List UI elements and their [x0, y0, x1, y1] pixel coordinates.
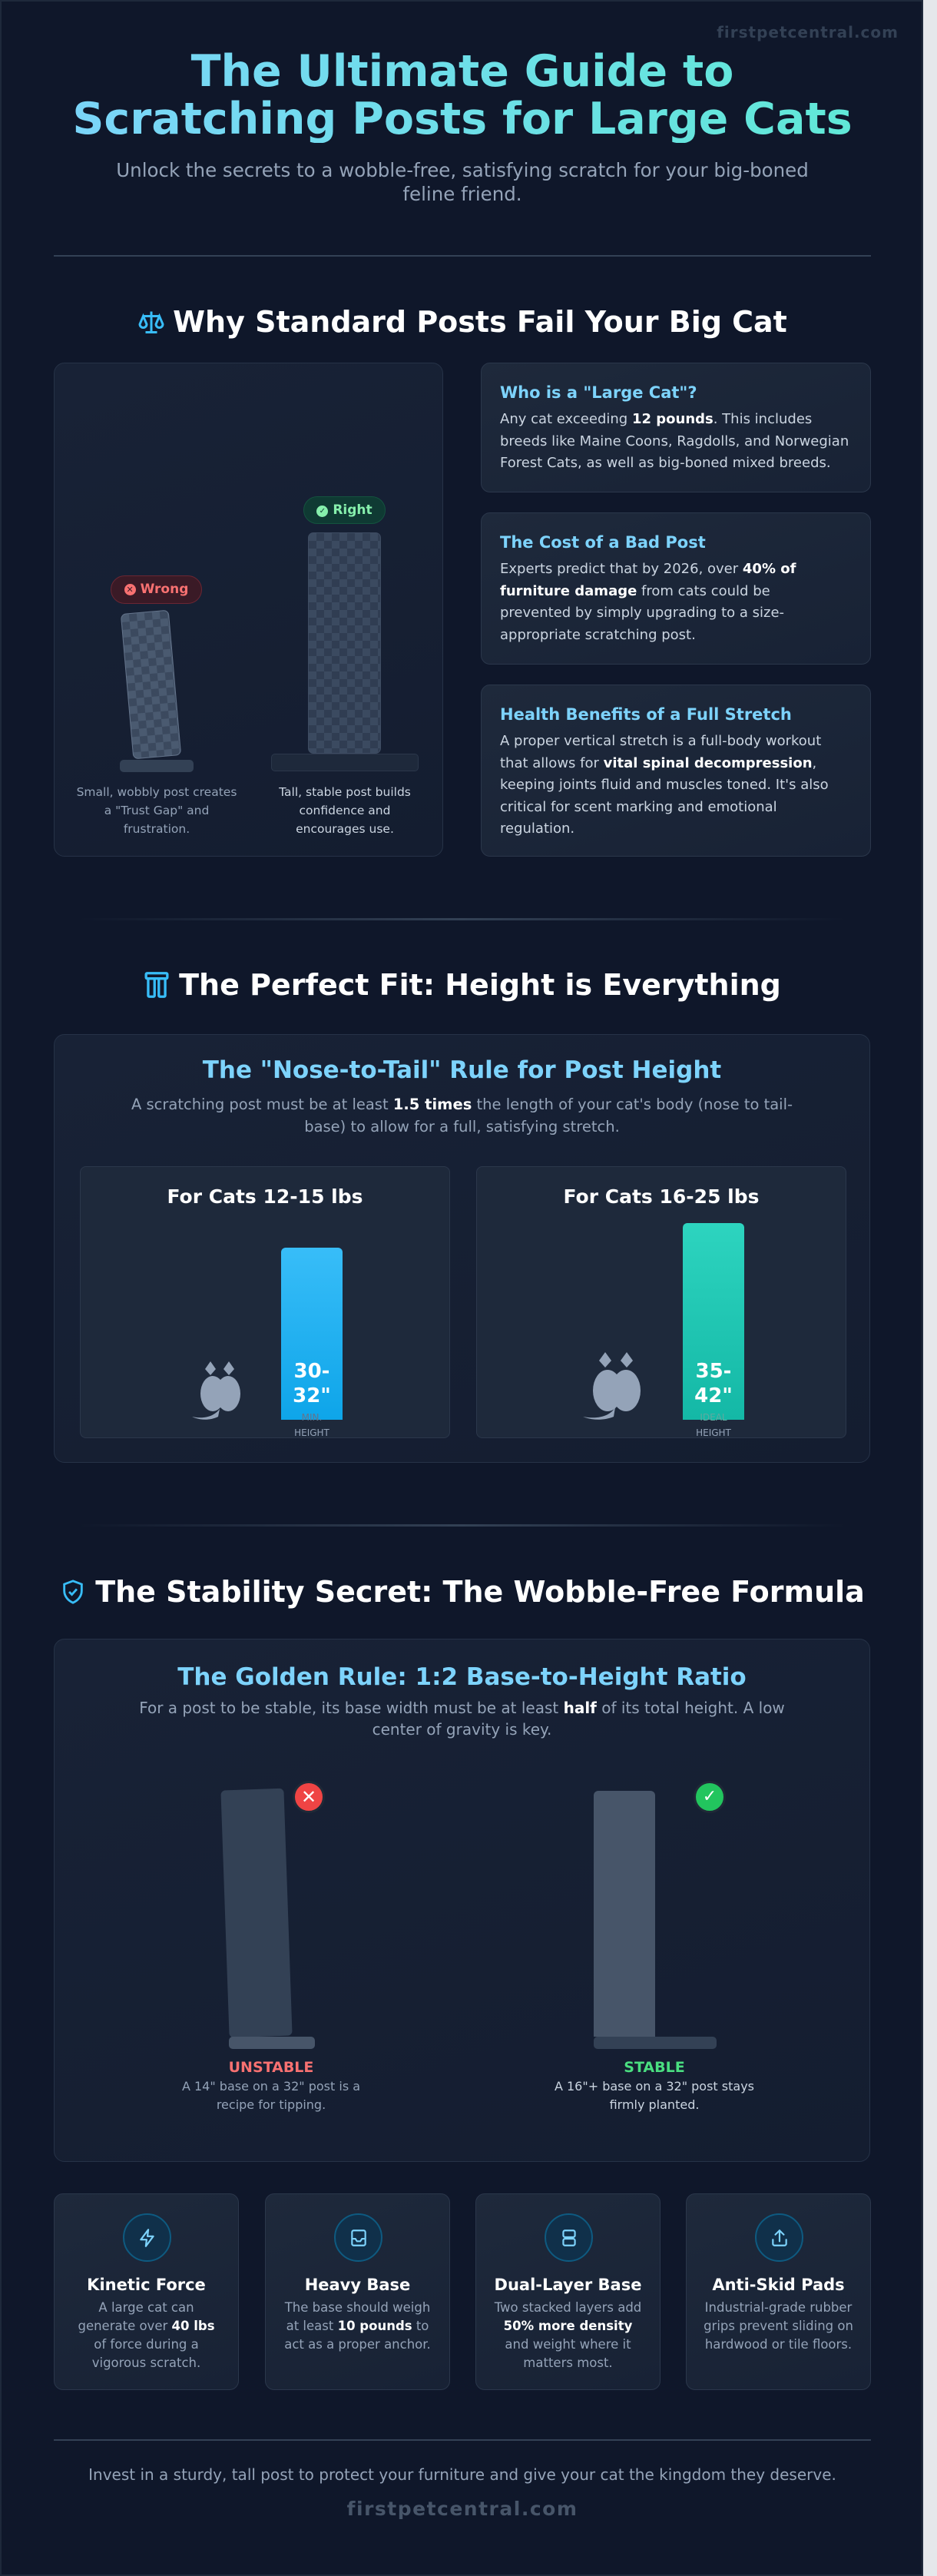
panel: golden rule: The Golden Rule: 1:2 Base-to-Height Ratio — [177, 1663, 747, 1691]
feature: dual-layer base: Dual-Layer Base — [495, 2276, 641, 2294]
feature: heavy base: Heavy Base — [305, 2276, 410, 2294]
card: health: A proper vertical stretch is a full-body workout — [500, 733, 821, 749]
feature: anti-skid pads — [686, 2193, 871, 2390]
stable label — [555, 2059, 754, 2112]
feature: anti-skid pads: Anti-Skid Pads — [712, 2276, 845, 2294]
subcard: 16-25 lbs: For Cats 16-25 lbs — [563, 1185, 760, 1208]
stable label: A 16"+ base on a 32" post stays — [555, 2079, 754, 2094]
card: health: critical for scent marking and emotional — [500, 799, 777, 814]
badge: right — [303, 496, 386, 524]
badge: wrong: ✕ — [126, 585, 134, 595]
subcard: 12-15 lbs — [80, 1166, 450, 1438]
feature: kinetic force — [54, 2193, 239, 2390]
heading: stability: The Stability Secret: The Wobble-Free Formula — [95, 1575, 865, 1609]
subcard: 12-15 lbs: HEIGHT — [294, 1427, 329, 1438]
unstable label: UNSTABLE — [229, 2059, 313, 2076]
stable label: firmly planted. — [610, 2097, 699, 2112]
panel: height rule: A scratching post must be at least 1.5 times the length of your cat's body (nose to tail-base) to allow for a full, satisfying stretch. — [131, 1096, 793, 1135]
footer site: firstpetcentral.com — [347, 2498, 578, 2520]
card: large cat: Forest Cats, as well as big-boned mixed breeds. — [500, 455, 831, 471]
unstable label — [182, 2059, 360, 2112]
card: health: Health Benefits of a Full Stretch — [500, 705, 792, 724]
panel: wrong vs right posts — [54, 363, 443, 857]
panel: height rule: The "Nose-to-Tail" Rule for Post Height — [203, 1056, 721, 1084]
feature: heavy base — [265, 2193, 450, 2390]
badge: right: ✓ — [320, 507, 326, 516]
feature: dual-layer base: Two stacked layers add 50% more density and weight where it matters most. — [495, 2300, 641, 2370]
badge: wrong: Wrong — [141, 582, 188, 597]
unstable label: A 14" base on a 32" post is a — [182, 2079, 360, 2094]
icon: x badge: ✕ — [301, 1786, 316, 1808]
icon: x badge — [293, 1781, 325, 1813]
subtitle: Unlock the secrets to a wobble-free, satisfying scratch for your big-boned feline friend. — [116, 159, 809, 205]
title: The Ultimate Guide to — [191, 46, 733, 97]
subcard: 12-15 lbs: MIN. — [302, 1412, 322, 1423]
badge: right: Right — [333, 502, 372, 518]
panel: golden rule: For a post to be stable, its base width must be at least half of its total height. A low center of gravity is key. — [139, 1699, 785, 1739]
feature: kinetic force: Kinetic Force — [87, 2276, 206, 2294]
icon: check badge — [694, 1781, 726, 1813]
bar: 30-32 — [281, 1248, 343, 1420]
card: large cat — [481, 363, 871, 492]
card: cost — [481, 512, 871, 665]
feature: heavy base: The base should weigh at least 10 pounds to act as a proper anchor. — [284, 2300, 431, 2352]
watermark top: firstpetcentral.com — [717, 23, 899, 41]
panel: golden rule — [54, 1639, 870, 2162]
card: large cat: Who is a "Large Cat"? — [500, 383, 697, 402]
subcard: 16-25 lbs: 42" — [694, 1384, 733, 1407]
stable label: STABLE — [624, 2059, 685, 2076]
card: health: regulation. — [500, 821, 574, 837]
card: health — [481, 685, 871, 857]
subcard: 16-25 lbs: IDEAL — [700, 1412, 727, 1423]
subcard: 16-25 lbs: HEIGHT — [696, 1427, 731, 1438]
unstable post — [220, 1789, 293, 2037]
subcard: 12-15 lbs: For Cats 12-15 lbs — [167, 1185, 363, 1208]
card: health: keeping joints fluid and muscles toned. It's also — [500, 777, 829, 793]
title — [2, 48, 923, 143]
card: health: that allows for vital spinal decompression, — [500, 754, 816, 771]
feature: dual-layer base — [475, 2193, 661, 2390]
feature: kinetic force: A large cat can generate over 40 lbs of force during a vigorous scratch. — [78, 2300, 215, 2370]
heading: why standard posts fail: Why Standard Posts Fail Your Big Cat — [173, 305, 787, 339]
panel: height rule — [54, 1034, 870, 1463]
subcard: 12-15 lbs: 32" — [293, 1384, 331, 1407]
card: cost: The Cost of a Bad Post — [500, 533, 706, 552]
icon: big cat — [583, 1352, 641, 1420]
card: cost: Experts predict that by 2026, over 40% of — [500, 561, 796, 577]
subcard: 12-15 lbs: 30- — [293, 1360, 329, 1383]
unstable label: recipe for tipping. — [217, 2097, 326, 2112]
card: large cat: breeds like Maine Coons, Ragdolls, and Norwegian — [500, 433, 849, 449]
card: cost: appropriate scratching post. — [500, 627, 696, 642]
bar: 35-42 — [683, 1223, 744, 1420]
heading: perfect fit: The Perfect Fit: Height is Everything — [179, 968, 781, 1002]
caption wrong: Small, wobbly post creates a "Trust Gap" and frustration. — [77, 785, 237, 836]
icon: cat — [192, 1361, 240, 1420]
card: large cat: Any cat exceeding 12 pounds. This includes — [500, 411, 812, 427]
stable post — [594, 1791, 655, 2037]
subcard: 16-25 lbs — [476, 1166, 846, 1438]
caption right: Tall, stable post builds confidence and encourages use. — [279, 785, 411, 836]
card: cost: furniture damage from cats could be — [500, 582, 770, 599]
footer text: Invest in a sturdy, tall post to protect your furniture and give your cat the kingdom they deserve. — [88, 2465, 836, 2484]
icon: check badge: ✓ — [703, 1787, 717, 1806]
subcard: 16-25 lbs: 35- — [696, 1360, 731, 1383]
right post — [308, 532, 381, 754]
wrong post — [121, 610, 181, 759]
feature: anti-skid pads: Industrial-grade rubber grips prevent sliding on hardwood or tile floors. — [704, 2300, 853, 2352]
badge: wrong — [111, 575, 202, 604]
card: cost: prevented by simply upgrading to a size- — [500, 605, 784, 621]
title: Scratching Posts for Large Cats — [72, 94, 853, 144]
